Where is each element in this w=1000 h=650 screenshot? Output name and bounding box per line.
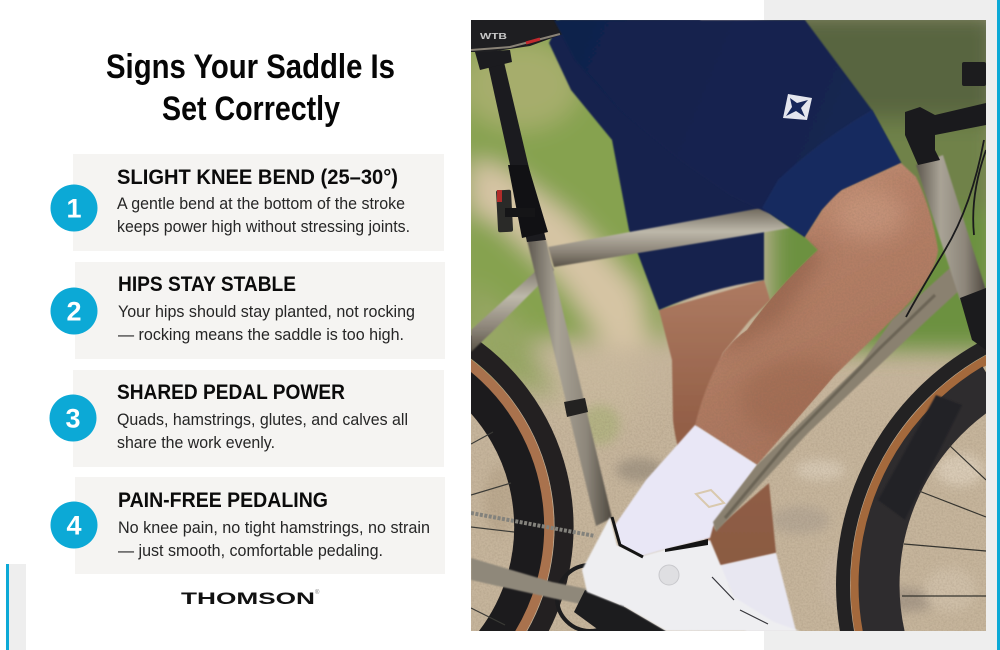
body text 4: [118, 519, 430, 560]
down tube: [713, 268, 962, 532]
body text 3: Quads, hamstrings, glutes, and calves all: [117, 411, 408, 429]
number badge 4: 4: [66, 510, 82, 540]
far leg navy shorts: [549, 20, 764, 310]
logo: Thomson wordmark: THOMSON: [181, 590, 315, 608]
seat stay tube: [471, 260, 554, 352]
seatpost: [475, 50, 548, 242]
crank and sole: [574, 590, 666, 631]
head tube: [916, 155, 986, 350]
photo background: blurred grass and gravel: [450, 10, 1000, 631]
logo: Thomson wordmark: [181, 589, 320, 608]
number badge 4: [50, 502, 98, 548]
panel: sign 4 pain free: [50, 477, 445, 574]
number badge 3: [50, 394, 96, 442]
accent: cyan left edge: [6, 564, 9, 650]
panel: sign 3 pedal power: [50, 370, 444, 467]
logo: Thomson wordmark: ®: [315, 589, 320, 596]
body text 1: keeps power high without stressing joints.: [117, 218, 410, 236]
panel: sign 2 hips: [50, 262, 445, 359]
near leg skin: [690, 160, 940, 470]
shorts hem band: [762, 110, 901, 237]
saddle: [471, 20, 563, 52]
chainstay tube: [471, 558, 592, 606]
rear wheel: [460, 340, 564, 640]
number badge 1: [50, 184, 98, 232]
card background 1: [73, 154, 444, 251]
body text 2: Your hips should stay planted, not rocking: [118, 303, 415, 321]
heading 4: PAIN-FREE PEDALING: [118, 489, 328, 512]
chainring: [557, 565, 623, 631]
title: Set Correctly: [162, 90, 340, 128]
saddle: WTB: [480, 31, 507, 41]
panel: grey backing block right: [764, 0, 997, 650]
photo: cyclist leg and bike: [450, 10, 1000, 640]
card background 3: [73, 370, 444, 467]
cables: [906, 140, 986, 317]
number badge 1: 1: [66, 194, 82, 224]
white cycling shoe: [582, 517, 800, 631]
shorts brand logo: [783, 94, 812, 120]
near leg white sock: [615, 425, 757, 556]
body text 2: — rocking means the saddle is too high.: [118, 326, 404, 344]
body text 3: [117, 411, 408, 452]
heading 1: SLIGHT KNEE BEND (25–30°): [117, 166, 398, 189]
far leg white sock: [712, 553, 796, 631]
card background 4: [75, 477, 445, 574]
body text 2: [118, 303, 415, 344]
card background 2: [75, 262, 445, 359]
far leg skin: [659, 280, 776, 568]
number badge 3: 3: [65, 404, 81, 434]
heading 3: SHARED PEDAL POWER: [117, 381, 345, 404]
number badge 2: [50, 288, 98, 334]
top tube: [548, 208, 790, 267]
front wheel: [843, 343, 993, 640]
panel: grey backing block left: [8, 564, 26, 650]
panel: sign 1 knee bend: [50, 154, 444, 251]
body text 4: — just smooth, comfortable pedaling.: [118, 542, 383, 560]
number badge 2: 2: [66, 296, 82, 326]
seat tube: [527, 240, 612, 526]
chain: [471, 513, 595, 536]
body text 4: No knee pain, no tight hamstrings, no strain: [118, 519, 430, 537]
body text 1: A gentle bend at the bottom of the stroke: [117, 195, 405, 213]
body text 3: share the work evenly.: [117, 434, 275, 452]
stem and handlebar: [905, 62, 986, 165]
accent: cyan right edge: [997, 0, 1000, 650]
near thigh navy shorts: [554, 20, 901, 237]
body text 1: [117, 195, 410, 236]
title: [106, 48, 395, 128]
title: Signs Your Saddle Is: [106, 48, 395, 86]
heading 2: HIPS STAY STABLE: [118, 273, 296, 296]
